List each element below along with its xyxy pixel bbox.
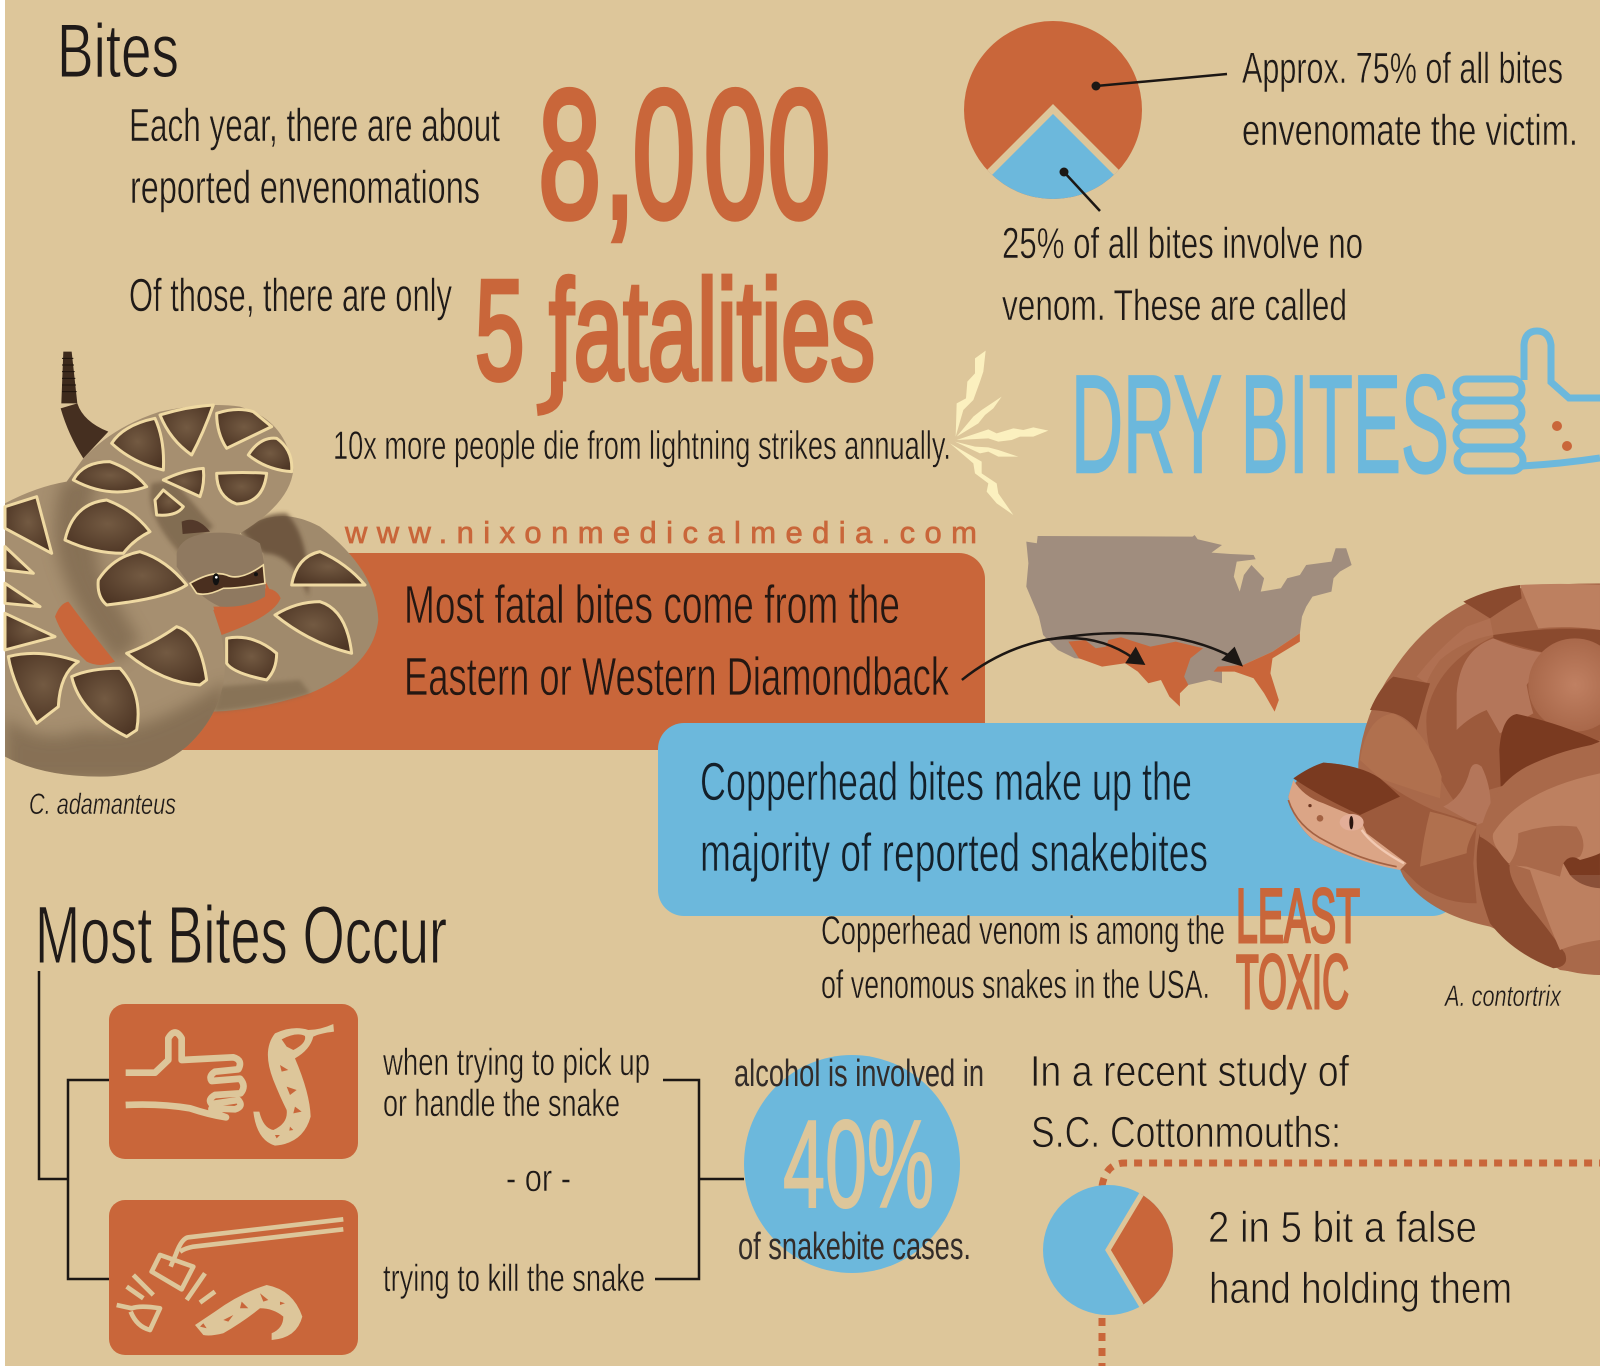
text: most fatal bites: Most fatal bites come from the [404, 575, 900, 635]
icon: thumb up hand with bite [1455, 331, 1600, 471]
text: copperhead bites: Copperhead bites make up the [700, 752, 1192, 812]
text: copperhead bites [700, 752, 1208, 883]
text: yearly envenomations [129, 99, 500, 213]
text: most fatal bites [404, 575, 950, 707]
pie chart: false hand bites [1043, 1185, 1173, 1315]
callout: 40 percent alcohol: 40% [783, 1096, 934, 1234]
caption: C. adamanteus: C. adamanteus [29, 788, 176, 821]
text: lightning comparison: 10x more people die from lightning strikes annually. [333, 424, 951, 468]
icon: lightning [950, 351, 1048, 515]
text: copperhead bites: majority of reported snakebites [700, 823, 1208, 883]
statistic: least toxic: TOXIC [1236, 940, 1349, 1025]
text: killing: trying to kill the snake [383, 1258, 645, 1300]
text: copperhead venom: Copperhead venom is among the [821, 909, 1225, 953]
text: copperhead venom [821, 909, 1225, 1007]
text: false hand: 2 in 5 bit a false [1208, 1203, 1477, 1252]
text: handling [382, 1042, 650, 1125]
callout: 40 percent alcohol [734, 1053, 984, 1273]
text: false hand: hand holding them [1209, 1264, 1512, 1313]
statistic: least toxic: LEAST [1236, 874, 1360, 959]
text: handling: when trying to pick up [382, 1042, 650, 1084]
heading: Bites: Bites [57, 9, 179, 94]
text: 25 percent: 25% of all bites involve no [1002, 219, 1363, 268]
illustration: copperhead snake [1288, 583, 1600, 975]
statistic: 8,000: 8,000 [538, 54, 830, 257]
text: only fatalities: Of those, there are only [129, 269, 452, 321]
panel: fatal bites [55, 553, 985, 750]
text: or: - or - [506, 1158, 571, 1200]
dotted path [1102, 1163, 1600, 1366]
text: cottonmouth study [1030, 1047, 1350, 1157]
map: United States [962, 535, 1352, 712]
text: website url: www.nixonmedicalmedia.com [344, 515, 977, 550]
callout: 40 percent alcohol: alcohol is involved in [734, 1053, 984, 1095]
text: yearly envenomations: Each year, there are about [129, 99, 500, 151]
pie chart: bites envenomated [945, 21, 1227, 217]
text: cottonmouth study: In a recent study of [1030, 1047, 1350, 1096]
text: 75 percent [1242, 44, 1578, 155]
heading: Most Bites Occur: Most Bites Occur [35, 890, 447, 981]
text: handling: or handle the snake [383, 1083, 620, 1125]
text: 25 percent [1002, 219, 1363, 330]
statistic: 5 fatalities: 5 fatalities [475, 251, 875, 410]
text: copperhead venom: of venomous snakes in the USA. [821, 963, 1210, 1007]
text: false hand [1208, 1203, 1512, 1313]
text: yearly envenomations: reported envenomations [130, 161, 480, 213]
connector tree [39, 971, 744, 1279]
text: 25 percent: venom. These are called [1002, 281, 1347, 330]
statistic: least toxic [1236, 874, 1360, 1025]
illustration: diamondback rattlesnake [5, 352, 378, 780]
text: most fatal bites: Eastern or Western Diamondback [404, 647, 950, 707]
callout: 40 percent alcohol: of snakebite cases. [738, 1226, 971, 1268]
text: cottonmouth study: S.C. Cottonmouths: [1031, 1108, 1341, 1157]
panel: copperhead [658, 723, 1458, 916]
panel: killing icon [109, 1200, 358, 1355]
panel: handling icon [109, 1004, 358, 1159]
statistic: 5 fatalities [475, 251, 875, 410]
